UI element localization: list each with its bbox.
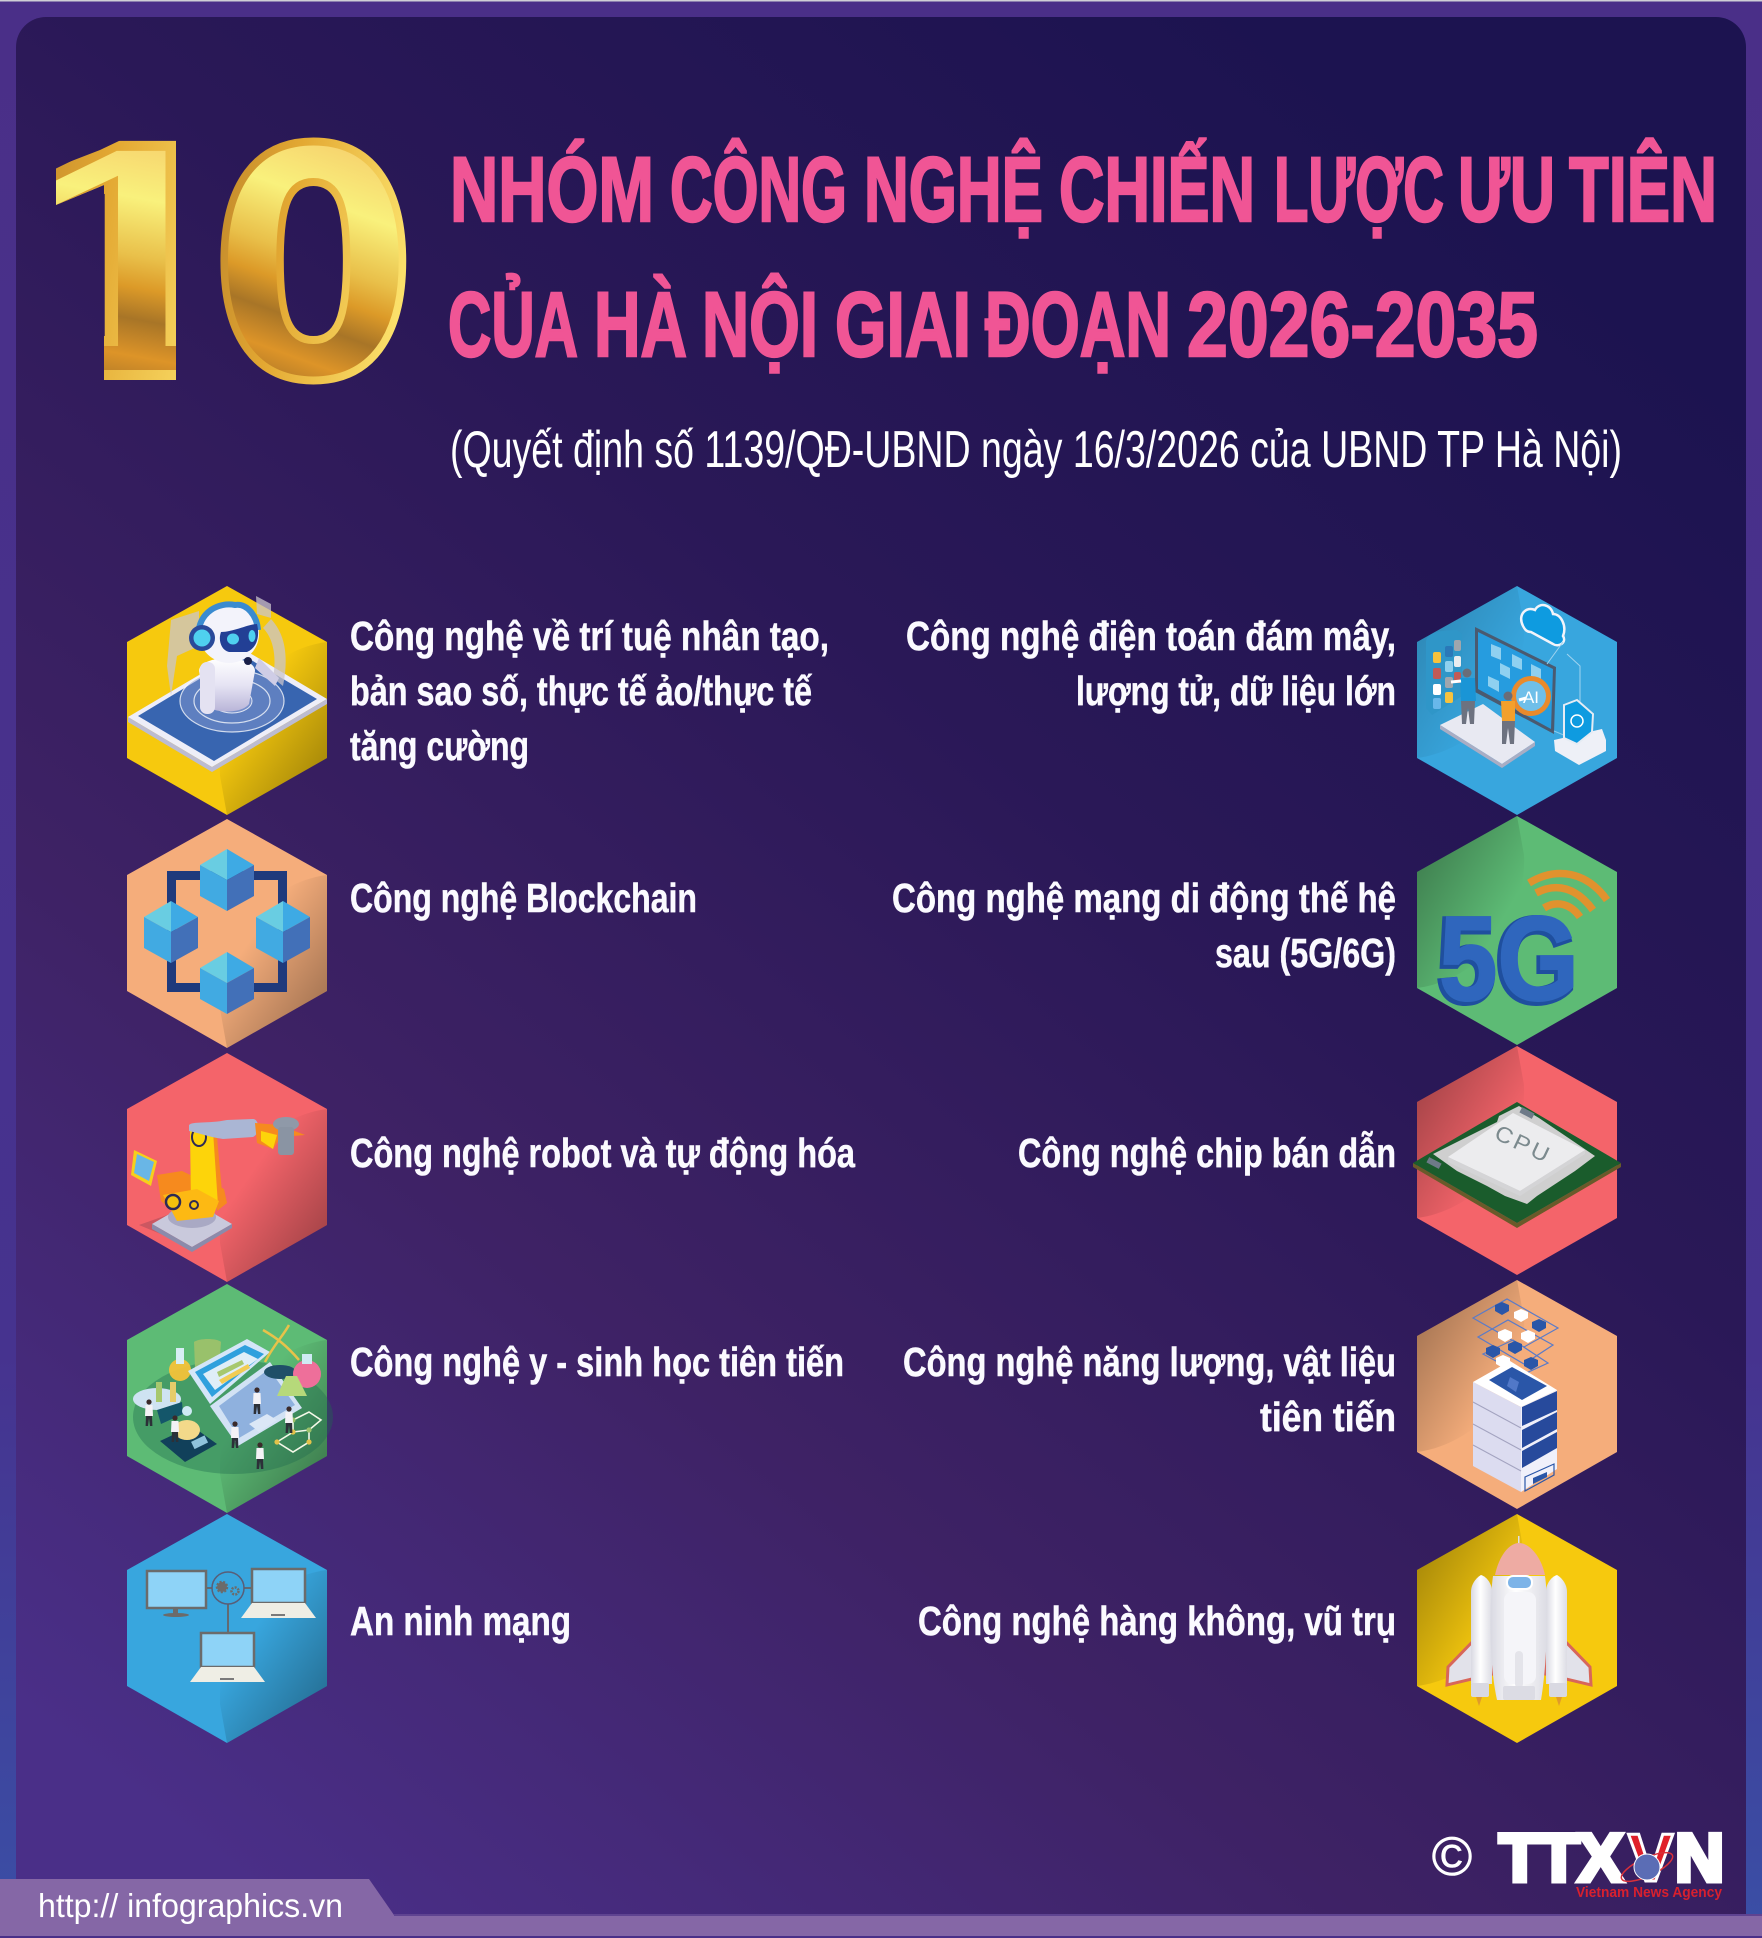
text: chip: Công nghệ chip bán dẫn [1018, 1130, 1396, 1176]
logo: TTXVN: © [1432, 1825, 1472, 1887]
text: 5G [892, 875, 1396, 976]
text: cloud: Công nghệ điện toán đám mây, [906, 613, 1396, 659]
url text: http:// infographics.vn [38, 1887, 343, 1924]
icon: industrial robot arm [131, 1117, 305, 1252]
hexagon: energy and materials (peach) [1417, 1280, 1617, 1509]
footer bar [0, 1879, 1762, 1938]
icon: blockchain cubes [144, 849, 310, 1014]
hexagon: cloud/AI (blue) [1417, 586, 1617, 815]
hexagon: robot arm (red) [127, 1053, 327, 1282]
title: CÔNG [670, 138, 847, 241]
icon: robot on tablet [128, 596, 327, 772]
logo: TTXVN [1432, 1820, 1724, 1901]
hexagon: semiconductor chip (red) [1413, 1046, 1621, 1275]
title: CHIẾN [1059, 138, 1255, 241]
text: energy and materials: Công nghệ năng lượng, vật liệu [903, 1339, 1396, 1385]
logo: TTXVN: N [1675, 1820, 1724, 1896]
text: blockchain: Công nghệ Blockchain [350, 875, 697, 921]
logo: TTXVN: Vietnam News Agency [1576, 1884, 1723, 1901]
title: NHÓM [450, 138, 654, 241]
logo: TTXVN: V [1628, 1820, 1673, 1896]
big number 10 [56, 138, 406, 384]
title: NỘI [702, 273, 818, 376]
text: energy and materials: tiên tiến [1260, 1394, 1396, 1440]
icon: CPU chip: CPU [1491, 1120, 1556, 1168]
title: ƯU [1458, 139, 1555, 241]
text: energy and materials [903, 1339, 1396, 1440]
text: cloud [906, 613, 1396, 714]
text: AI [350, 613, 829, 769]
icon: computer network [147, 1569, 316, 1682]
icon: cloud, AI board and people: AI [1523, 688, 1539, 707]
text: biotech: Công nghệ y - sinh học tiên tiến [350, 1339, 844, 1385]
icon: 5G label with signal arcs: 5G [1437, 894, 1577, 1028]
hexagon: AI robot (yellow) [127, 586, 327, 815]
icon: server building and data cubes [1473, 1299, 1558, 1492]
icon: CPU chip [1413, 1102, 1621, 1228]
title [448, 137, 1717, 376]
title: CỦA [448, 273, 578, 376]
title: GIAI [835, 274, 971, 376]
big number 10: 0 [210, 83, 417, 451]
hexagon: blockchain (peach) [127, 819, 327, 1048]
text: AI: bản sao số, thực tế ảo/thực tế [350, 668, 812, 714]
title: HÀ [594, 274, 687, 376]
text: cloud: lượng tử, dữ liệu lớn [1076, 668, 1396, 714]
text: AI: Công nghệ về trí tuệ nhân tạo, [350, 613, 829, 659]
text: aerospace: Công nghệ hàng không, vũ trụ [918, 1598, 1396, 1644]
hexagon: cyber security (blue) [127, 1514, 327, 1743]
icon: 5G label with signal arcs: 5G [1439, 892, 1579, 1026]
icon: cloud, AI board and people [1426, 605, 1606, 768]
big number 10: 1 [8, 74, 254, 446]
logo: TTXVN: TTX [1499, 1820, 1623, 1896]
hexagon: aerospace (yellow) [1417, 1514, 1617, 1743]
icon: lab scene with laptop [133, 1325, 333, 1474]
hexagon: 5G (green) [1417, 816, 1617, 1045]
title: ĐOẠN [985, 274, 1171, 376]
text: cyber security: An ninh mạng [350, 1598, 571, 1644]
text: AI: tăng cường [350, 723, 529, 769]
title: LƯỢC [1274, 139, 1444, 241]
text: 5G: Công nghệ mạng di động thế hệ [892, 875, 1396, 921]
hexagon: biotech (green) [127, 1284, 333, 1513]
text: 5G: sau (5G/6G) [1215, 930, 1396, 976]
text: robot: Công nghệ robot và tự động hóa [350, 1130, 856, 1176]
title: 2026-2035 [1187, 274, 1538, 376]
icon: space shuttle [1447, 1536, 1591, 1706]
title: NGHỆ [864, 138, 1043, 241]
